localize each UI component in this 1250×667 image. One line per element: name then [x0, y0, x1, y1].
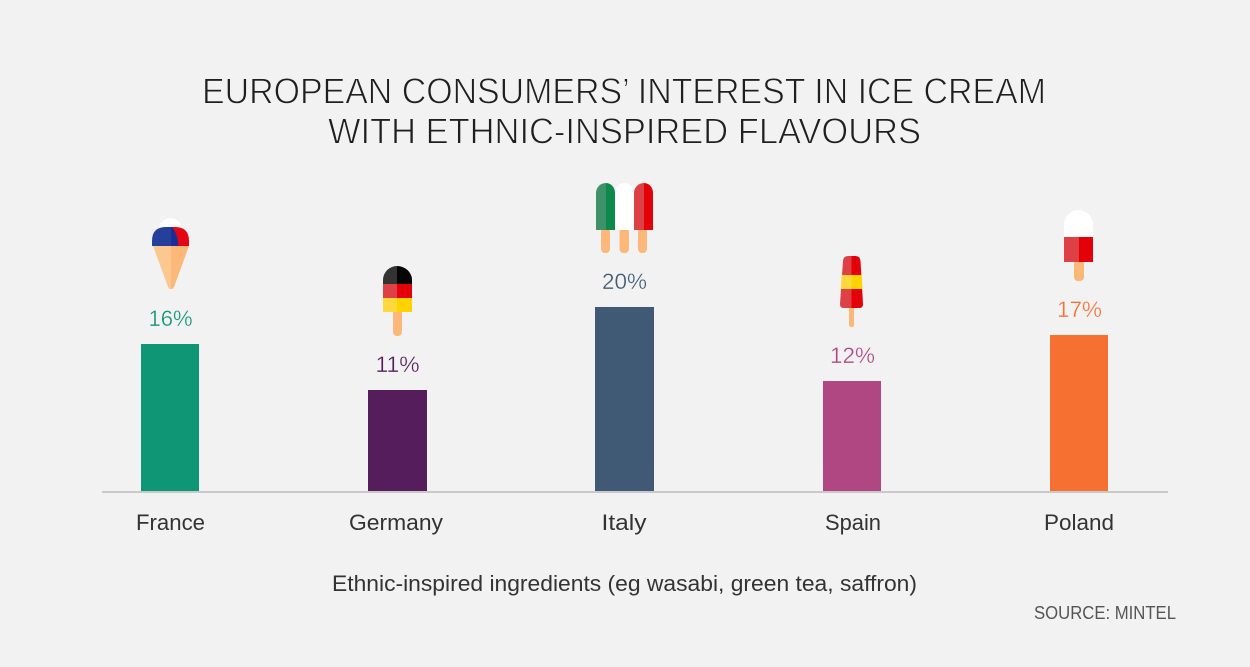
bar: France	[141, 344, 199, 491]
icon: Italy ice lollies	[596, 183, 653, 253]
label: France: France	[136, 510, 205, 535]
bar: Italy	[595, 307, 654, 491]
icon: Poland ice lolly	[1064, 210, 1093, 281]
value: France: 16%	[148, 306, 192, 331]
label: Italy: Italy	[602, 510, 646, 535]
icon: Spain ice lolly	[840, 256, 863, 327]
title	[202, 70, 1046, 152]
icon: France ice cream cone	[152, 218, 189, 289]
label: Poland: Poland	[1044, 510, 1114, 535]
value: Germany: 11%	[376, 352, 420, 377]
icon: Germany ice lolly	[383, 266, 412, 336]
bar: Spain	[823, 381, 881, 491]
title: WITH ETHNIC-INSPIRED FLAVOURS	[328, 110, 921, 152]
value: Italy: 20%	[602, 269, 647, 294]
label: Spain: Spain	[825, 510, 881, 535]
bar chart	[102, 269, 1168, 535]
caption: Ethnic-inspired ingredients (eg wasabi, green tea, saffron)	[332, 571, 917, 596]
value: Poland: 17%	[1057, 297, 1102, 322]
label: Germany: Germany	[349, 510, 443, 535]
bar: Germany	[368, 390, 427, 491]
bar: Poland	[1050, 335, 1108, 491]
value: Spain: 12%	[830, 343, 875, 368]
title: EUROPEAN CONSUMERS’ INTEREST IN ICE CREAM	[202, 70, 1046, 112]
source: SOURCE: MINTEL	[1034, 603, 1176, 623]
